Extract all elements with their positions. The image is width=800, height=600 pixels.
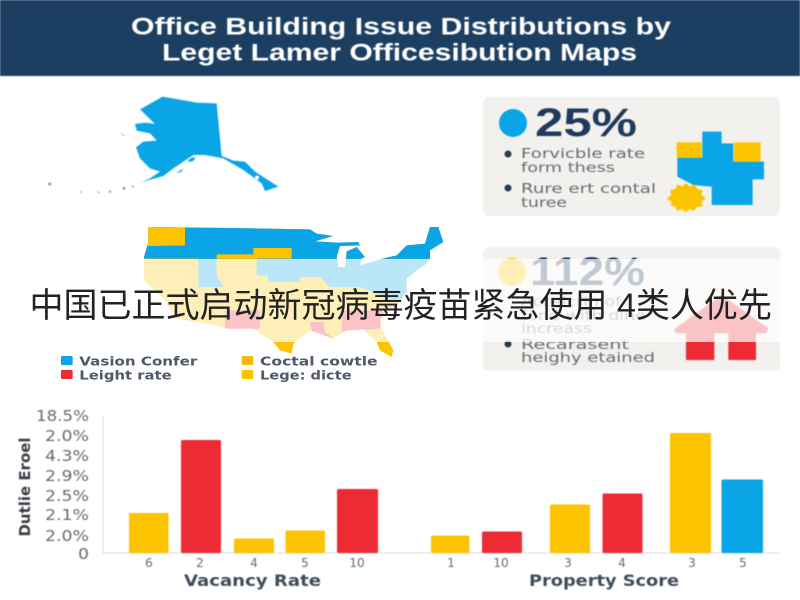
overlay caption: 中国已正式启动新冠病毒疫苗紧急使用 4类人优先: [30, 287, 772, 325]
x axis ticks: 5: [301, 556, 309, 570]
stat value: 25%: [535, 101, 637, 145]
title: Office Building Issue Distributions by: [131, 14, 672, 40]
x axis title: Property Score: [529, 571, 679, 590]
x axis ticks: 5: [739, 556, 747, 570]
x axis title: Vacancy Rate: [184, 571, 321, 590]
y axis ticks: 2.5%: [45, 487, 89, 505]
y axis ticks: 4.3%: [45, 447, 89, 465]
bullet list: Accelcrin of: [521, 295, 622, 310]
x axis ticks: [145, 556, 365, 570]
y axis and baseline: [103, 415, 400, 553]
bullet list: increass: [521, 322, 592, 337]
map: Alaska: [48, 97, 278, 193]
header banner: [0, 0, 800, 76]
bullet list: [504, 295, 655, 366]
bullet list: [504, 147, 656, 211]
legend item: Leight rate: Leight rate: [79, 367, 172, 382]
y axis ticks: 18.5%: [36, 407, 89, 425]
legend: [61, 353, 378, 382]
legend item: Vasion Confer: Vasion Confer: [79, 353, 198, 368]
y axis ticks: 2.9%: [45, 467, 89, 485]
x axis ticks: 3: [564, 556, 572, 570]
x axis ticks: 6: [145, 556, 153, 570]
bullet list: Rure ert contal: [521, 182, 656, 197]
y axis ticks: 2.0%: [45, 427, 89, 445]
x axis ticks: [447, 556, 747, 570]
bullet list: turee: [521, 196, 567, 211]
x axis ticks: 4: [618, 556, 626, 570]
bullet list: form thess: [521, 161, 615, 176]
stat marker: [499, 109, 527, 137]
y axis ticks: 2.1%: [45, 506, 89, 524]
x axis ticks: 1: [447, 556, 455, 570]
y axis title: Dutlie Eroel: [16, 438, 34, 536]
title: [131, 14, 672, 66]
icon: blue building with sun: [667, 132, 764, 212]
bullet list: heighy etained: [521, 351, 655, 366]
bars: [431, 536, 470, 553]
x axis ticks: 3: [688, 556, 696, 570]
x axis ticks: 4: [250, 556, 258, 570]
bullet list: fond with dine: [521, 309, 646, 324]
x axis ticks: 10: [493, 556, 509, 570]
legend item: Coctal cowtle: Coctal cowtle: [260, 353, 378, 368]
icon: red house: [674, 295, 768, 360]
baseline: [400, 552, 780, 554]
x axis ticks: 2: [196, 556, 204, 570]
stat value: 112%: [530, 250, 645, 294]
panel: 112% stat: [483, 247, 780, 371]
title: Leget Lamer Officesibution Maps: [162, 40, 637, 66]
bullet list: Recarasent: [521, 338, 629, 353]
map: contiguous United States: [144, 227, 444, 357]
y axis ticks: [36, 407, 89, 563]
legend item: Lege dicte: Lege: dicte: [260, 367, 352, 382]
panel: 25% stat: [483, 97, 780, 216]
stat marker: [498, 258, 526, 286]
bar chart: vacancy rate: [16, 407, 400, 590]
overlay caption band: [0, 259, 800, 342]
y axis ticks: 2.0%: [45, 527, 89, 545]
bullet list: Forvicble rate: [521, 147, 645, 162]
bar chart: property score: [400, 433, 780, 590]
x axis ticks: 10: [349, 556, 365, 570]
bars: [129, 513, 168, 553]
y axis ticks: 0: [78, 545, 89, 563]
